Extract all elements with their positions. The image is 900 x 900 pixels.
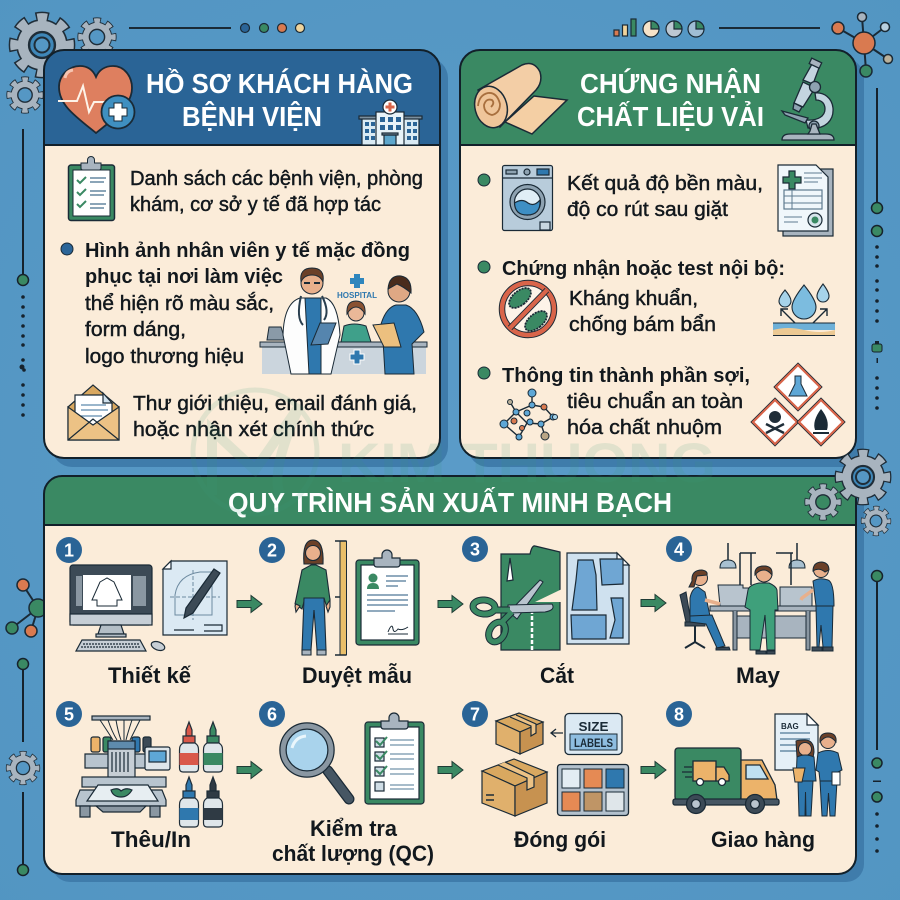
figure: delivery staff	[793, 733, 842, 816]
label: giao hàng: Giao hàng	[711, 827, 815, 852]
step 1: thiết kế	[56, 537, 227, 688]
step 3: cắt	[462, 536, 629, 688]
badge: 3	[462, 536, 488, 562]
step 8: giao hàng	[666, 701, 842, 852]
icon: water repellent	[773, 284, 835, 336]
badge: 6	[259, 701, 285, 727]
decoration: top-left gears	[10, 18, 113, 110]
text: kết quả độ bền màu: Kết quả độ bền màu,	[567, 173, 763, 195]
icon: magnifier	[283, 726, 349, 799]
icon: bill of lading document: BAG	[781, 722, 799, 731]
text: danh sách bệnh viện: khám, cơ sở y tế đã hợp tác	[130, 194, 381, 216]
arrow	[237, 596, 262, 612]
badge: 8	[666, 701, 692, 727]
heading: hồ sơ khách hàng bệnh viện	[146, 68, 413, 132]
figure: standing worker centre	[745, 566, 778, 654]
text: hình ảnh nhân viên: Hình ảnh nhân viên y tế mặc đồng	[85, 240, 410, 262]
badge: 4	[666, 536, 692, 562]
icon: fabric swatches tray	[558, 764, 628, 816]
text: thông tin thành phần sợi: tiêu chuẩn an toàn	[567, 391, 743, 413]
decoration: left molecule	[6, 579, 47, 637]
label: may: May	[736, 663, 781, 688]
icon: size label tag	[551, 714, 622, 754]
text: hình ảnh nhân viên: logo thương hiệu	[85, 346, 244, 368]
text: kháng khuẩn: chống bám bẩn	[569, 314, 716, 336]
icon: microscope	[782, 58, 834, 140]
illustration: sewing workshop	[680, 543, 834, 654]
heading: hồ sơ khách hàng bệnh viện: HỒ SƠ KHÁCH HÀNG	[146, 68, 413, 99]
icon: embroidery machine	[76, 716, 170, 817]
panel: hồ sơ khách hàng bệnh viện	[44, 50, 448, 467]
icon: molecule	[500, 389, 558, 440]
icon: ruler	[335, 541, 346, 655]
icon: approval clipboard	[356, 550, 419, 645]
badge: 2	[259, 537, 285, 563]
badge: 8: 8	[674, 704, 684, 724]
text: thư giới thiệu	[133, 393, 417, 441]
decoration: top-right molecule	[832, 12, 892, 77]
heading: chứng nhận chất liệu vải	[577, 68, 764, 132]
icon: green cloth	[501, 546, 562, 650]
icon: qc checklist	[365, 713, 424, 804]
label: cắt: Cắt	[540, 663, 575, 688]
heading: chứng nhận chất liệu vải: CHẤT LIỆU VẢI	[577, 100, 764, 132]
decoration: right gears	[808, 454, 888, 533]
watermark: kim thuong	[193, 390, 716, 514]
arrow	[438, 762, 463, 778]
icon: fabric roll	[470, 64, 567, 134]
arrow	[641, 762, 666, 778]
icon: computer	[70, 565, 166, 652]
badge: 4: 4	[674, 540, 684, 560]
step 6: kiểm tra chất lượng	[259, 701, 434, 866]
icon: scissors	[472, 580, 553, 645]
icon: clipboard checklist	[68, 156, 114, 220]
icon: bill of lading document	[775, 714, 818, 770]
icon: small box	[496, 713, 543, 754]
text: thông tin thành phần sợi	[502, 365, 750, 439]
badge: 1	[56, 537, 82, 563]
arrow	[438, 596, 463, 612]
watermark: kim thuong: KIM THUONG	[338, 431, 716, 494]
panel: quy trình sản xuất minh bạch	[44, 476, 864, 882]
figure: standing worker right	[801, 562, 834, 651]
label: hospital sign	[337, 274, 377, 300]
heading: quy trình: QUY TRÌNH SẢN XUẤT MINH BẠCH	[228, 486, 672, 518]
badge: 2: 2	[267, 540, 277, 560]
icon: envelope	[68, 385, 119, 440]
icon: no bacteria	[502, 283, 554, 335]
badge: 7: 7	[470, 704, 480, 724]
label: hospital sign: HOSPITAL	[337, 291, 377, 300]
text: danh sách bệnh viện	[130, 168, 423, 216]
heading: hồ sơ khách hàng bệnh viện: BỆNH VIỆN	[182, 101, 322, 132]
text: kết quả độ bền màu	[567, 173, 763, 221]
heading: chứng nhận chất liệu vải: CHỨNG NHẬN	[580, 68, 761, 99]
icon: size label tag: LABELS	[574, 738, 613, 750]
text: hình ảnh nhân viên: phục tại nơi làm việc	[85, 266, 283, 288]
badge: 1: 1	[64, 540, 74, 560]
icon: hospital building	[359, 100, 422, 145]
badge: 7	[462, 701, 488, 727]
icon: big box	[482, 759, 547, 816]
label: đóng gói: Đóng gói	[514, 827, 606, 852]
icon: size label tag: SIZE	[578, 719, 609, 734]
bullet: green	[478, 174, 490, 186]
step 5: thêu/in	[56, 701, 222, 852]
text: hình ảnh nhân viên	[85, 240, 410, 368]
figure: receptionist	[341, 301, 371, 342]
arrow	[641, 594, 666, 612]
icon: heart with plus	[58, 66, 134, 133]
panel: chứng nhận chất liệu vải	[460, 50, 864, 467]
label: thiết kế: Thiết kế	[108, 663, 192, 688]
figure: seated worker	[680, 570, 730, 650]
text: thư giới thiệu: Thư giới thiệu, email đánh giá,	[133, 393, 417, 415]
decoration: left lower rail and gear	[9, 658, 37, 876]
step 7: đóng gói	[462, 701, 628, 852]
text: chứng nhận hoặc test: Chứng nhận hoặc test nội bộ:	[502, 258, 785, 280]
icon: blueprint and pen	[163, 561, 227, 635]
label: duyệt mẫu: Duyệt mẫu	[302, 663, 412, 688]
text: thông tin thành phần sợi: hóa chất nhuộm	[567, 417, 722, 439]
bullet: green	[478, 261, 490, 273]
badge: 5	[56, 701, 82, 727]
badge: 3: 3	[470, 540, 480, 560]
icon: delivery truck	[673, 748, 779, 814]
text: kết quả độ bền màu: độ co rút sau giặt	[567, 199, 728, 221]
text: hình ảnh nhân viên: form dáng,	[85, 319, 186, 341]
figure: doctor	[283, 268, 340, 374]
badge: 6: 6	[267, 704, 277, 724]
illustration: hospital staff at reception	[260, 268, 427, 374]
step 2: duyệt mẫu	[259, 537, 419, 688]
text: kháng khuẩn: Kháng khuẩn,	[569, 288, 698, 310]
text: thông tin thành phần sợi: Thông tin thành phần sợi,	[502, 365, 750, 387]
text: danh sách bệnh viện: Danh sách các bệnh viện, phòng	[130, 168, 423, 190]
icon: ink bottles	[180, 722, 222, 827]
figure: nurse	[373, 276, 424, 374]
arrow	[237, 762, 262, 778]
step 4: may	[666, 536, 834, 688]
label: kiểm tra chất lượng	[272, 816, 434, 866]
bullet: green	[478, 367, 490, 379]
bullet: blue	[61, 243, 73, 255]
text: kháng khuẩn	[569, 288, 716, 336]
icon: chemical hazard diamonds	[753, 365, 843, 444]
badge: 5: 5	[64, 704, 74, 724]
decoration: left rail	[18, 129, 28, 417]
decoration: top-left dots	[129, 24, 304, 32]
label: kiểm tra chất lượng: chất lượng (QC)	[272, 841, 434, 866]
label: kiểm tra chất lượng: Kiểm tra	[310, 816, 398, 841]
figure: woman model	[295, 540, 330, 655]
icon: certificate document	[778, 165, 833, 236]
decoration: top-right charts	[614, 19, 820, 37]
icon: pattern sheet	[567, 553, 629, 644]
decoration: right rail	[872, 88, 882, 853]
icon: washing machine	[502, 166, 552, 230]
text: hình ảnh nhân viên: thể hiện rõ màu sắc,	[85, 292, 274, 315]
text: thư giới thiệu: hoặc nhận xét chính thức	[133, 419, 374, 441]
label: thêu/in: Thêu/In	[111, 827, 191, 852]
